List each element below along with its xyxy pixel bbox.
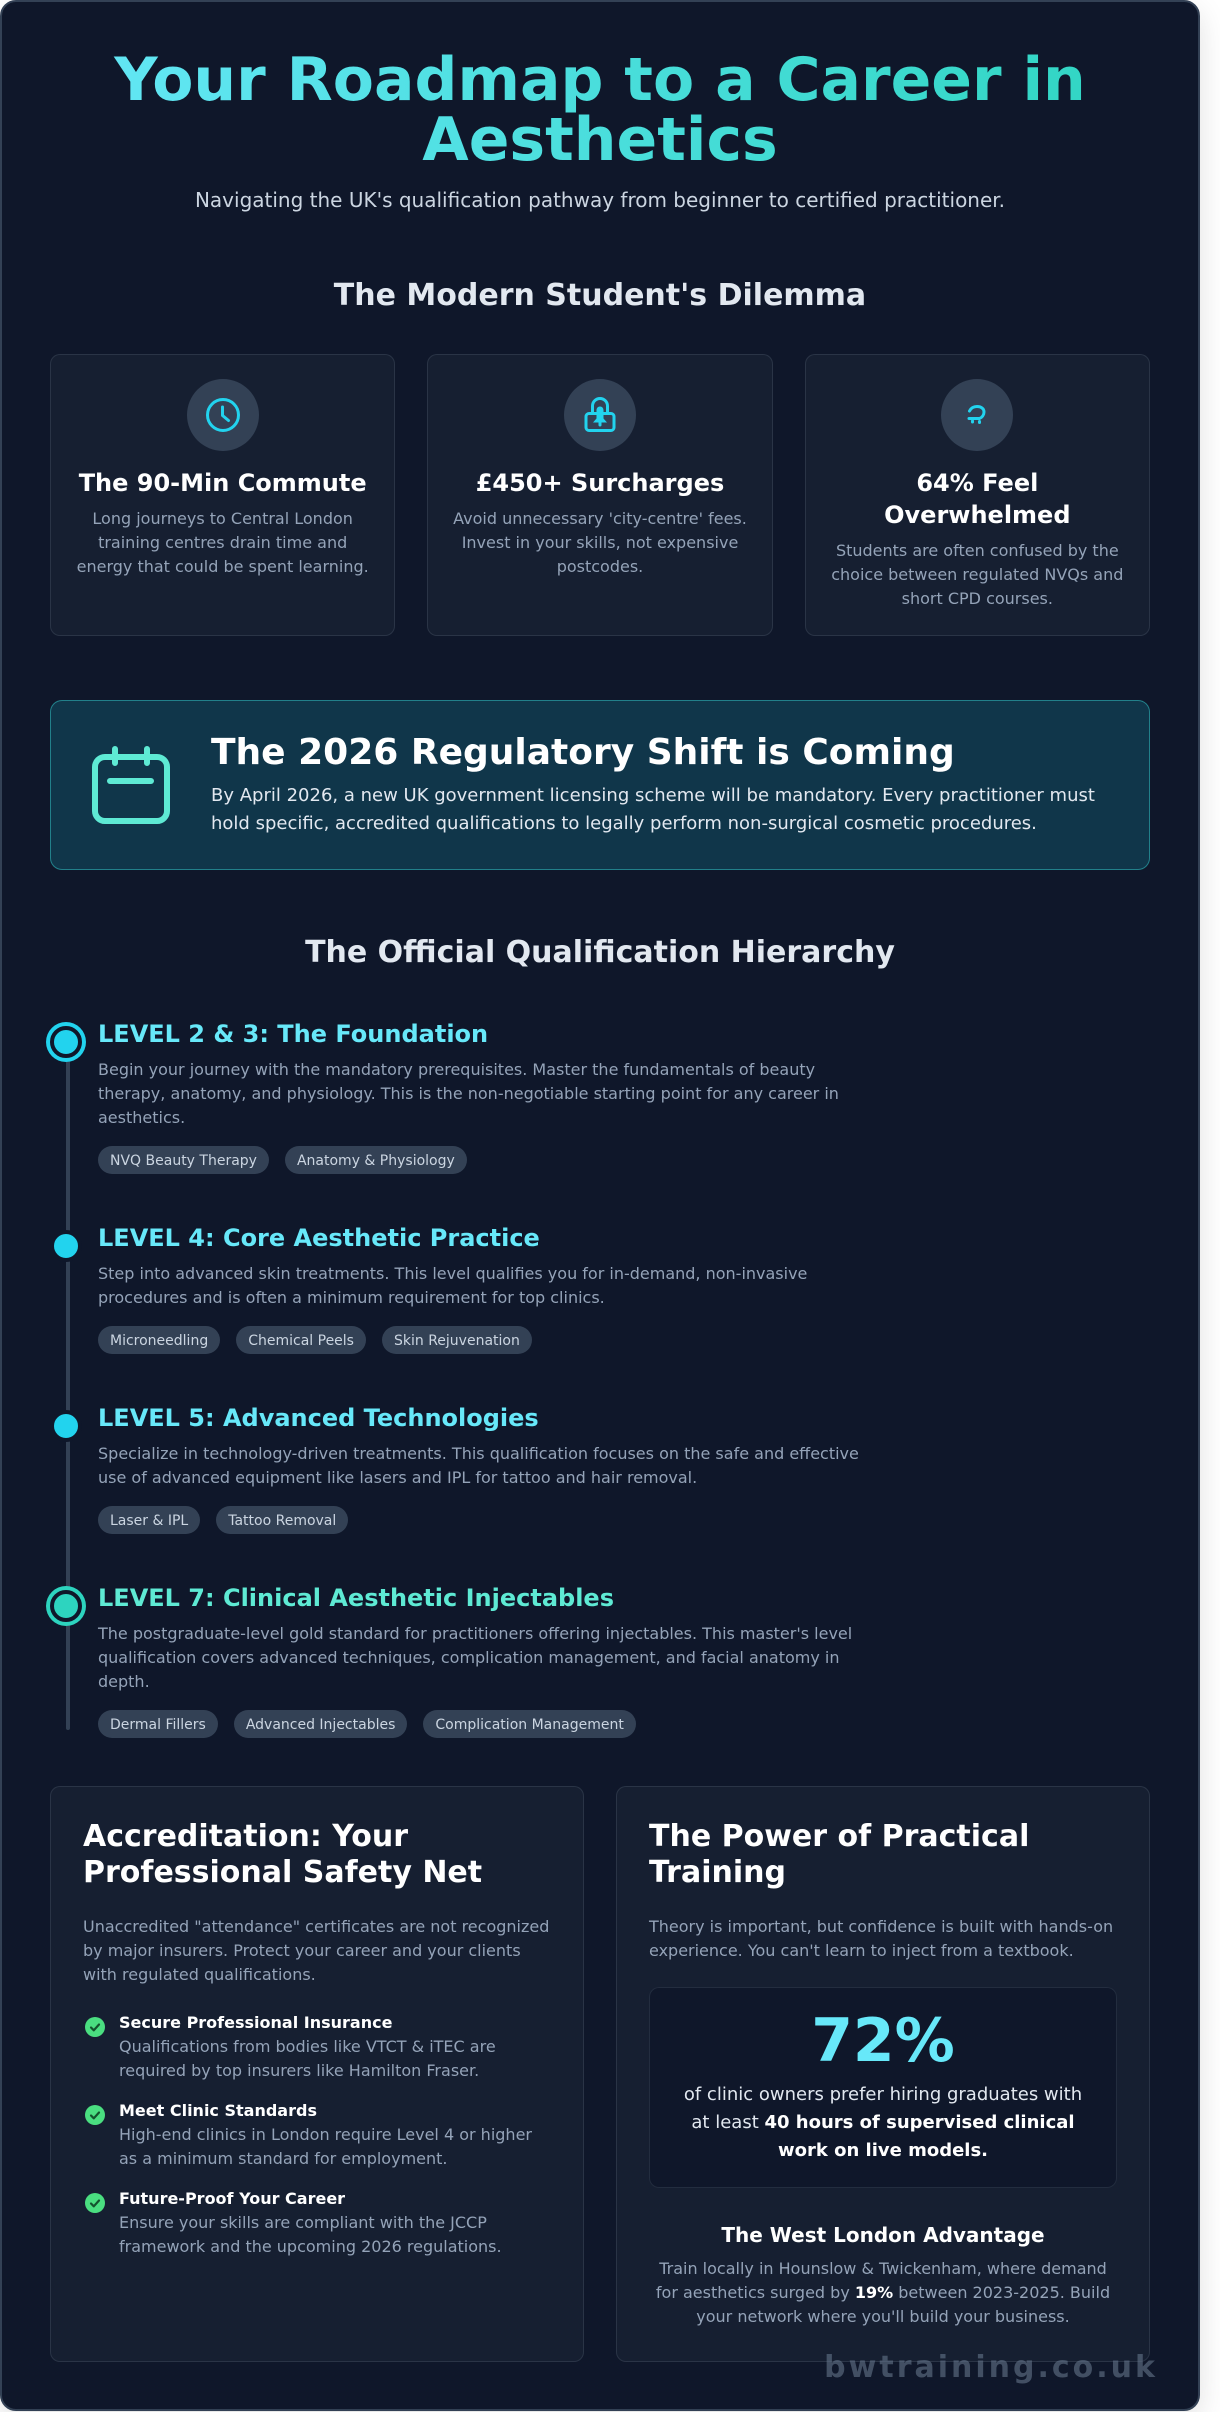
panel text	[648, 1917, 1113, 1960]
benefit text: required by top insurers like Hamilton Fraser.	[119, 2061, 479, 2080]
benefit heading: Future-Proof Your Career	[119, 2189, 345, 2208]
level tags: Microneedling	[110, 1333, 208, 1349]
icon: lock	[564, 379, 636, 451]
benefit: insurance	[85, 2013, 496, 2080]
card text: Students are often confused by the	[836, 541, 1119, 560]
benefit text: Ensure your skills are compliant with the JCCP	[119, 2213, 487, 2232]
callout text	[211, 785, 1095, 834]
benefit heading: Secure Professional Insurance	[119, 2013, 392, 2032]
panel text	[83, 1917, 549, 1984]
level tags: Chemical Peels	[248, 1333, 354, 1349]
card heading: The 90-Min Commute	[79, 469, 367, 497]
benefit text	[119, 2213, 502, 2256]
card heading: 64% Feel	[916, 469, 1038, 497]
west london text: your network where you'll build your business.	[696, 2306, 1070, 2326]
west london text: for aesthetics surged by 19% between 2023-2025. Build	[656, 2282, 1110, 2302]
level tags: Laser & IPL	[110, 1513, 188, 1529]
callout text: By April 2026, a new UK government licensing scheme will be mandatory. Every practitioner must	[211, 785, 1095, 806]
node: level 5	[50, 1410, 82, 1442]
panel heading	[649, 1819, 1029, 1890]
stat text: at least 40 hours of supervised clinical	[691, 2112, 1075, 2133]
level tags	[98, 1506, 348, 1534]
benefit: future-proof	[85, 2189, 502, 2256]
panel heading: The Power of Practical	[649, 1819, 1029, 1854]
card text: Invest in your skills, not expensive	[462, 533, 738, 552]
level text: depth.	[98, 1672, 150, 1691]
level text: Step into advanced skin treatments. This level qualifies you for in-demand, non-invasive	[98, 1264, 807, 1283]
node: level 4	[50, 1230, 82, 1262]
benefit text: Qualifications from bodies like VTCT & iTEC are	[119, 2037, 496, 2056]
benefit heading: Meet Clinic Standards	[119, 2101, 317, 2120]
panel heading: Accreditation: Your	[83, 1819, 408, 1854]
stat number: 72%	[811, 2006, 955, 2076]
timeline line	[66, 1050, 70, 1730]
level heading: LEVEL 7: Clinical Aesthetic Injectables	[98, 1584, 614, 1612]
card text	[831, 541, 1123, 608]
subheading: west london advantage: The West London Advantage	[721, 2223, 1045, 2247]
card text: energy that could be spent learning.	[77, 557, 369, 576]
level text: Begin your journey with the mandatory prerequisites. Master the fundamentals of beauty	[98, 1060, 815, 1079]
stat box: 72%	[649, 1987, 1117, 2188]
west london text	[656, 2258, 1110, 2326]
panel: 64% feel overwhelmed	[805, 354, 1150, 636]
panel text: with regulated qualifications.	[83, 1965, 316, 1984]
callout text: hold specific, accredited qualifications to legally perform non-surgical cosmetic procedures.	[211, 813, 1037, 834]
timeline	[46, 1020, 859, 1738]
panel heading	[83, 1819, 482, 1890]
level text: use of advanced equipment like lasers and IPL for tattoo and hair removal.	[98, 1468, 697, 1487]
level 5 entry	[98, 1404, 859, 1534]
benefit text: High-end clinics in London require Level 4 or higher	[119, 2125, 532, 2144]
level text: The postgraduate-level gold standard for practitioners offering injectables. This master's level	[98, 1624, 852, 1643]
icon: check	[85, 2017, 105, 2037]
level tags: Tattoo Removal	[228, 1513, 336, 1529]
panel text: by major insurers. Protect your career and your clients	[83, 1941, 521, 1960]
node: level 2 and 3	[50, 1026, 82, 1058]
west london text: Train locally in Hounslow & Twickenham, where demand	[659, 2258, 1107, 2278]
title: Aesthetics	[422, 105, 778, 175]
level 2 and 3 entry	[98, 1020, 839, 1174]
stat text	[684, 2084, 1082, 2161]
level tags: Complication Management	[435, 1717, 624, 1733]
level heading: LEVEL 5: Advanced Technologies	[98, 1404, 539, 1432]
card text: Avoid unnecessary 'city-centre' fees.	[453, 509, 747, 528]
stat text: of clinic owners prefer hiring graduates with	[684, 2084, 1082, 2105]
level text: therapy, anatomy, and physiology. This is the non-negotiable starting point for any career in	[98, 1084, 839, 1103]
panel heading: Professional Safety Net	[83, 1855, 482, 1890]
card text	[77, 509, 369, 576]
level text	[98, 1444, 859, 1487]
card heading	[884, 469, 1071, 529]
panel: 90-min commute	[50, 354, 395, 636]
card text: choice between regulated NVQs and	[831, 565, 1123, 584]
level text	[98, 1624, 852, 1691]
stat text: work on live models.	[778, 2140, 988, 2161]
heading: official qualification hierarchy: The Official Qualification Hierarchy	[305, 935, 895, 970]
card heading: Overwhelmed	[884, 501, 1071, 529]
benefit text: framework and the upcoming 2026 regulations.	[119, 2237, 502, 2256]
card text: postcodes.	[557, 557, 643, 576]
level 7 entry	[98, 1584, 852, 1738]
level 4 entry	[98, 1224, 807, 1354]
card heading: £450+ Surcharges	[476, 469, 724, 497]
icon: check	[85, 2105, 105, 2125]
level heading: LEVEL 4: Core Aesthetic Practice	[98, 1224, 540, 1252]
benefit text	[119, 2125, 532, 2168]
panel: practical training	[616, 1786, 1150, 2362]
callout: 2026 regulatory shift	[50, 700, 1150, 870]
panel: accreditation	[50, 1786, 584, 2362]
node: level 7	[50, 1590, 82, 1622]
icon: calendar	[92, 746, 170, 824]
panel: surcharges	[427, 354, 773, 636]
card text: short CPD courses.	[902, 589, 1053, 608]
level text	[98, 1264, 807, 1307]
subtitle: Navigating the UK's qualification pathway from beginner to certified practitioner.	[195, 188, 1005, 212]
callout heading: The 2026 Regulatory Shift is Coming	[211, 732, 955, 773]
panel text: experience. You can't learn to inject from a textbook.	[649, 1941, 1074, 1960]
panel text: Unaccredited "attendance" certificates are not recognized	[83, 1917, 549, 1936]
level text: procedures and is often a minimum requirement for top clinics.	[98, 1288, 605, 1307]
card text: training centres drain time and	[98, 533, 347, 552]
title: Your Roadmap to a Career in	[114, 45, 1086, 115]
panel text: Theory is important, but confidence is built with hands-on	[649, 1917, 1113, 1936]
level tags	[98, 1326, 532, 1354]
level tags	[98, 1146, 467, 1174]
icon: check	[85, 2193, 105, 2213]
level text: Specialize in technology-driven treatments. This qualification focuses on the safe and effective	[98, 1444, 859, 1463]
panel heading: Training	[649, 1855, 786, 1890]
icon: confusion glyph	[941, 379, 1013, 451]
benefit text	[119, 2037, 496, 2080]
title	[0, 50, 1200, 170]
level heading: LEVEL 2 & 3: The Foundation	[98, 1020, 488, 1048]
card text	[453, 509, 747, 576]
level tags: Dermal Fillers	[110, 1717, 206, 1733]
level tags: Advanced Injectables	[246, 1717, 395, 1733]
level tags: Skin Rejuvenation	[394, 1333, 520, 1349]
level tags: NVQ Beauty Therapy	[110, 1153, 257, 1169]
card text: Long journeys to Central London	[92, 509, 353, 528]
level text: qualification covers advanced techniques, complication management, and facial anatomy in	[98, 1648, 840, 1667]
benefit text: as a minimum standard for employment.	[119, 2149, 448, 2168]
icon: clock	[187, 379, 259, 451]
level tags	[98, 1710, 636, 1738]
watermark: bwtraining.co.uk	[824, 2350, 1158, 2385]
level text	[98, 1060, 839, 1127]
benefit: clinic standards	[85, 2101, 532, 2168]
level tags: Anatomy & Physiology	[297, 1153, 455, 1169]
heading: the modern student's dilemma: The Modern Student's Dilemma	[334, 278, 866, 313]
level text: aesthetics.	[98, 1108, 185, 1127]
